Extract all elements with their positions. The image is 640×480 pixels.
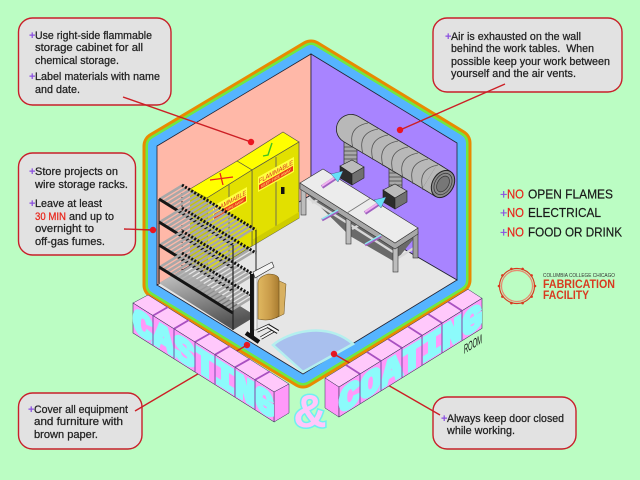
icon: red cross [210, 173, 233, 185]
rules list: + [500, 226, 507, 240]
right wall [311, 54, 457, 280]
title: CASTING block letters: G [255, 378, 274, 430]
title: ampersand: & [293, 385, 327, 437]
callout: wire racks [18, 153, 156, 255]
callout: wire racks: + [29, 198, 35, 210]
callout: wire racks: overnight to [35, 223, 94, 235]
title: CASTING block letters: C [133, 301, 153, 354]
title: CASTING block letters: T [195, 340, 215, 393]
vent boxes [340, 160, 407, 209]
callout: wire racks: off-gas fumes. [35, 236, 105, 248]
rules list: NO [507, 188, 524, 202]
callout: air exhaust: behind the work tables. When [451, 43, 594, 55]
leader lines behind letters [135, 345, 440, 415]
rules list: NO [507, 206, 524, 220]
air duct [344, 123, 459, 202]
label: flammable left: FLAMMABLE [214, 190, 246, 214]
room: rainbow hexagon border [157, 54, 457, 374]
title: COATING block letters: T [402, 334, 422, 386]
left flammable cabinet [190, 161, 252, 274]
logo: Fabrication Facility [498, 268, 616, 304]
left wall [157, 54, 311, 285]
callout: cabinet storage [18, 18, 254, 145]
callout: wire racks: Store projects on [35, 166, 118, 178]
logo: Fabrication Facility: FACILITY [543, 290, 589, 302]
rules list: FOOD OR DRINK [528, 226, 623, 240]
callout: brown paper: and furniture with [34, 416, 123, 428]
callout: cabinet storage: and date. [35, 84, 80, 96]
title: COATING block letters: I [422, 322, 442, 374]
rules list: OPEN FLAMES [528, 188, 613, 202]
callout: cabinet storage: chemical storage. [35, 55, 119, 67]
title: COATING block letters: C [339, 373, 360, 425]
callout: air exhaust: yourself and the air vents. [451, 68, 576, 80]
callout: keep door closed: while working. [446, 425, 515, 437]
callout: keep door closed [331, 351, 576, 449]
callout: air exhaust: + [445, 31, 451, 43]
callout: air exhaust [397, 18, 622, 133]
callout: cabinet storage: storage cabinet for all [35, 42, 143, 54]
callout: keep door closed: + [441, 413, 447, 425]
rules list [500, 188, 623, 240]
rules list: + [500, 206, 507, 220]
title: COATING block letters: A [381, 347, 402, 399]
icon: green check [263, 143, 272, 156]
arrows: air flow [322, 171, 386, 245]
callout: keep door closed: Always keep door closed [447, 413, 564, 425]
callout: cabinet storage: + [29, 71, 35, 83]
floor [157, 195, 457, 374]
title: COATING block letters: O [360, 360, 381, 412]
icon: gear ring [498, 268, 536, 304]
callout: wire racks: 30 MIN [35, 211, 66, 223]
title: CASTING block letters: A [153, 313, 174, 367]
callout: wire racks: Leave at least [35, 198, 102, 210]
callout: cabinet storage: Use right-side flammable [35, 30, 152, 42]
callout: brown paper: Cover all equipment [34, 404, 128, 416]
label: flammable left: KEEP FIRE AWAY [216, 197, 244, 218]
callout: air exhaust: Air is exhausted on the wall [451, 31, 581, 43]
title: CASTING block letters: N [235, 365, 255, 418]
logo: Fabrication Facility: FABRICATION [543, 279, 615, 291]
title: CASTING block letters: I [215, 352, 235, 405]
label: flammable left [213, 187, 247, 221]
callout: cabinet storage: + [29, 30, 35, 42]
title: CASTING block letters: S [174, 327, 195, 380]
title: COATING block letters [325, 289, 482, 425]
callout: brown paper [18, 342, 250, 449]
brown paper roll on stand [246, 262, 286, 342]
callout: air exhaust: possible keep your work between [451, 56, 610, 68]
wire storage rack [159, 185, 256, 330]
label: flammable right: KEEP FIRE AWAY [261, 167, 291, 189]
rules list: NO [507, 226, 524, 240]
callout: wire racks: and up to [69, 211, 114, 223]
label: flammable right: FLAMMABLE [259, 158, 293, 185]
door swing on floor [273, 331, 353, 372]
work tables [300, 169, 418, 272]
title: CASTING block letters [133, 295, 289, 430]
callout: wire racks: + [29, 166, 35, 178]
right flammable cabinet [237, 132, 299, 246]
label: flammable right [258, 157, 294, 192]
callout: brown paper: + [28, 404, 34, 416]
rules list: ELECTRICAL [528, 206, 601, 220]
rack shelf levels [159, 185, 256, 313]
title: COATING block letters: N [442, 309, 462, 361]
text: ROOM [464, 332, 482, 358]
logo: Fabrication Facility: COLUMBIA COLLEGE CHICAGO [543, 273, 616, 279]
title: COATING block letters: G [462, 297, 482, 349]
rules list: + [500, 188, 507, 202]
callout: cabinet storage: Label materials with name [35, 71, 160, 83]
callout: brown paper: brown paper. [34, 429, 98, 441]
callout: wire racks: wire storage racks. [34, 179, 128, 191]
